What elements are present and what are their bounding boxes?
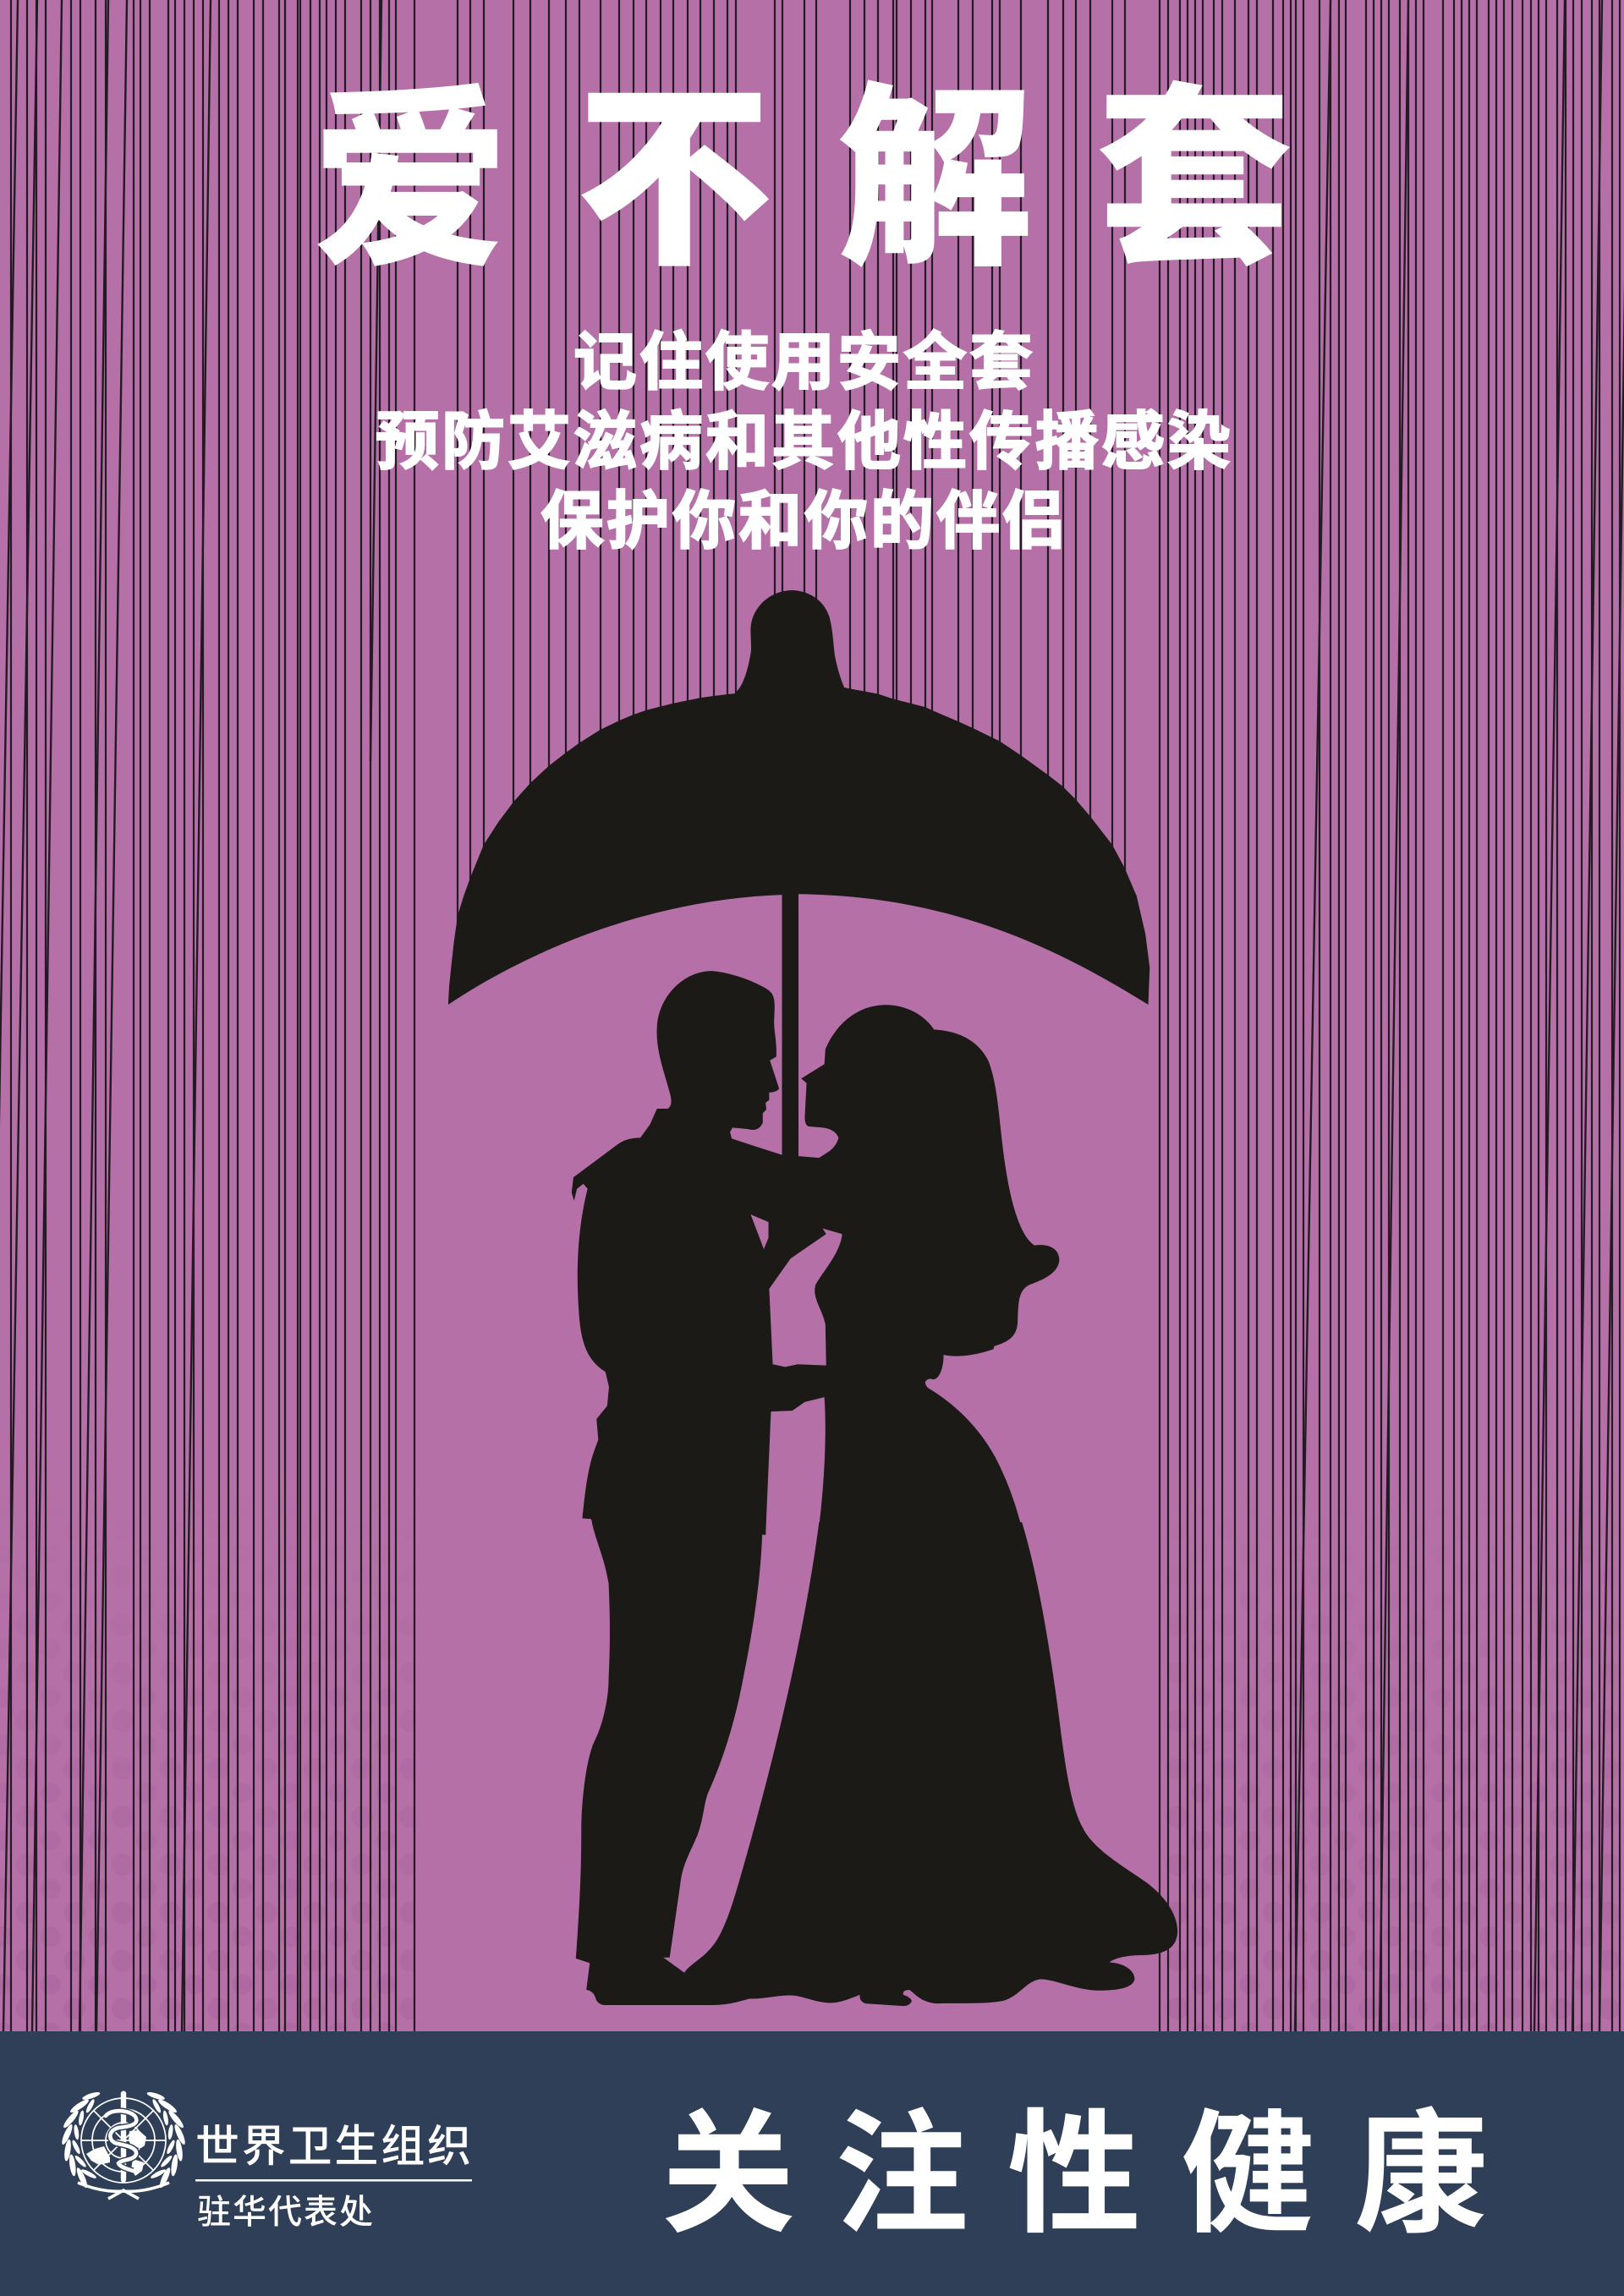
emblem ribbon — [78, 2183, 169, 2199]
title: 爱不解套 — [312, 71, 1292, 290]
emblem continents — [86, 2130, 146, 2176]
emblem rod and serpent — [106, 2091, 136, 2182]
slogan: 关注性健康 — [661, 2101, 1488, 2249]
couple silhouette — [572, 971, 1177, 2006]
emblem laurel right — [146, 2091, 187, 2189]
subtitle line 2: 预防艾滋病和其他性传播感染 — [376, 406, 1233, 477]
subtitle line 3: 保护你和你的伴侣 — [540, 485, 1068, 556]
umbrella — [448, 590, 1149, 1167]
subtitle line 1: 记住使用安全套 — [573, 326, 1035, 397]
WHO divider — [195, 2179, 472, 2182]
upper bodies — [572, 971, 1059, 1539]
emblem globe — [81, 2098, 166, 2183]
icon: WHO emblem — [60, 2091, 187, 2199]
subtitle — [376, 326, 1233, 556]
umbrella pole — [782, 892, 798, 1167]
footer band — [0, 2031, 1624, 2296]
China representative office: 驻华代表处 — [197, 2194, 373, 2231]
legs and gown — [576, 1522, 1177, 2006]
emblem laurel left — [60, 2091, 101, 2189]
umbrella canopy — [448, 590, 1149, 1005]
WHO name: 世界卫生组织 — [195, 2123, 471, 2172]
